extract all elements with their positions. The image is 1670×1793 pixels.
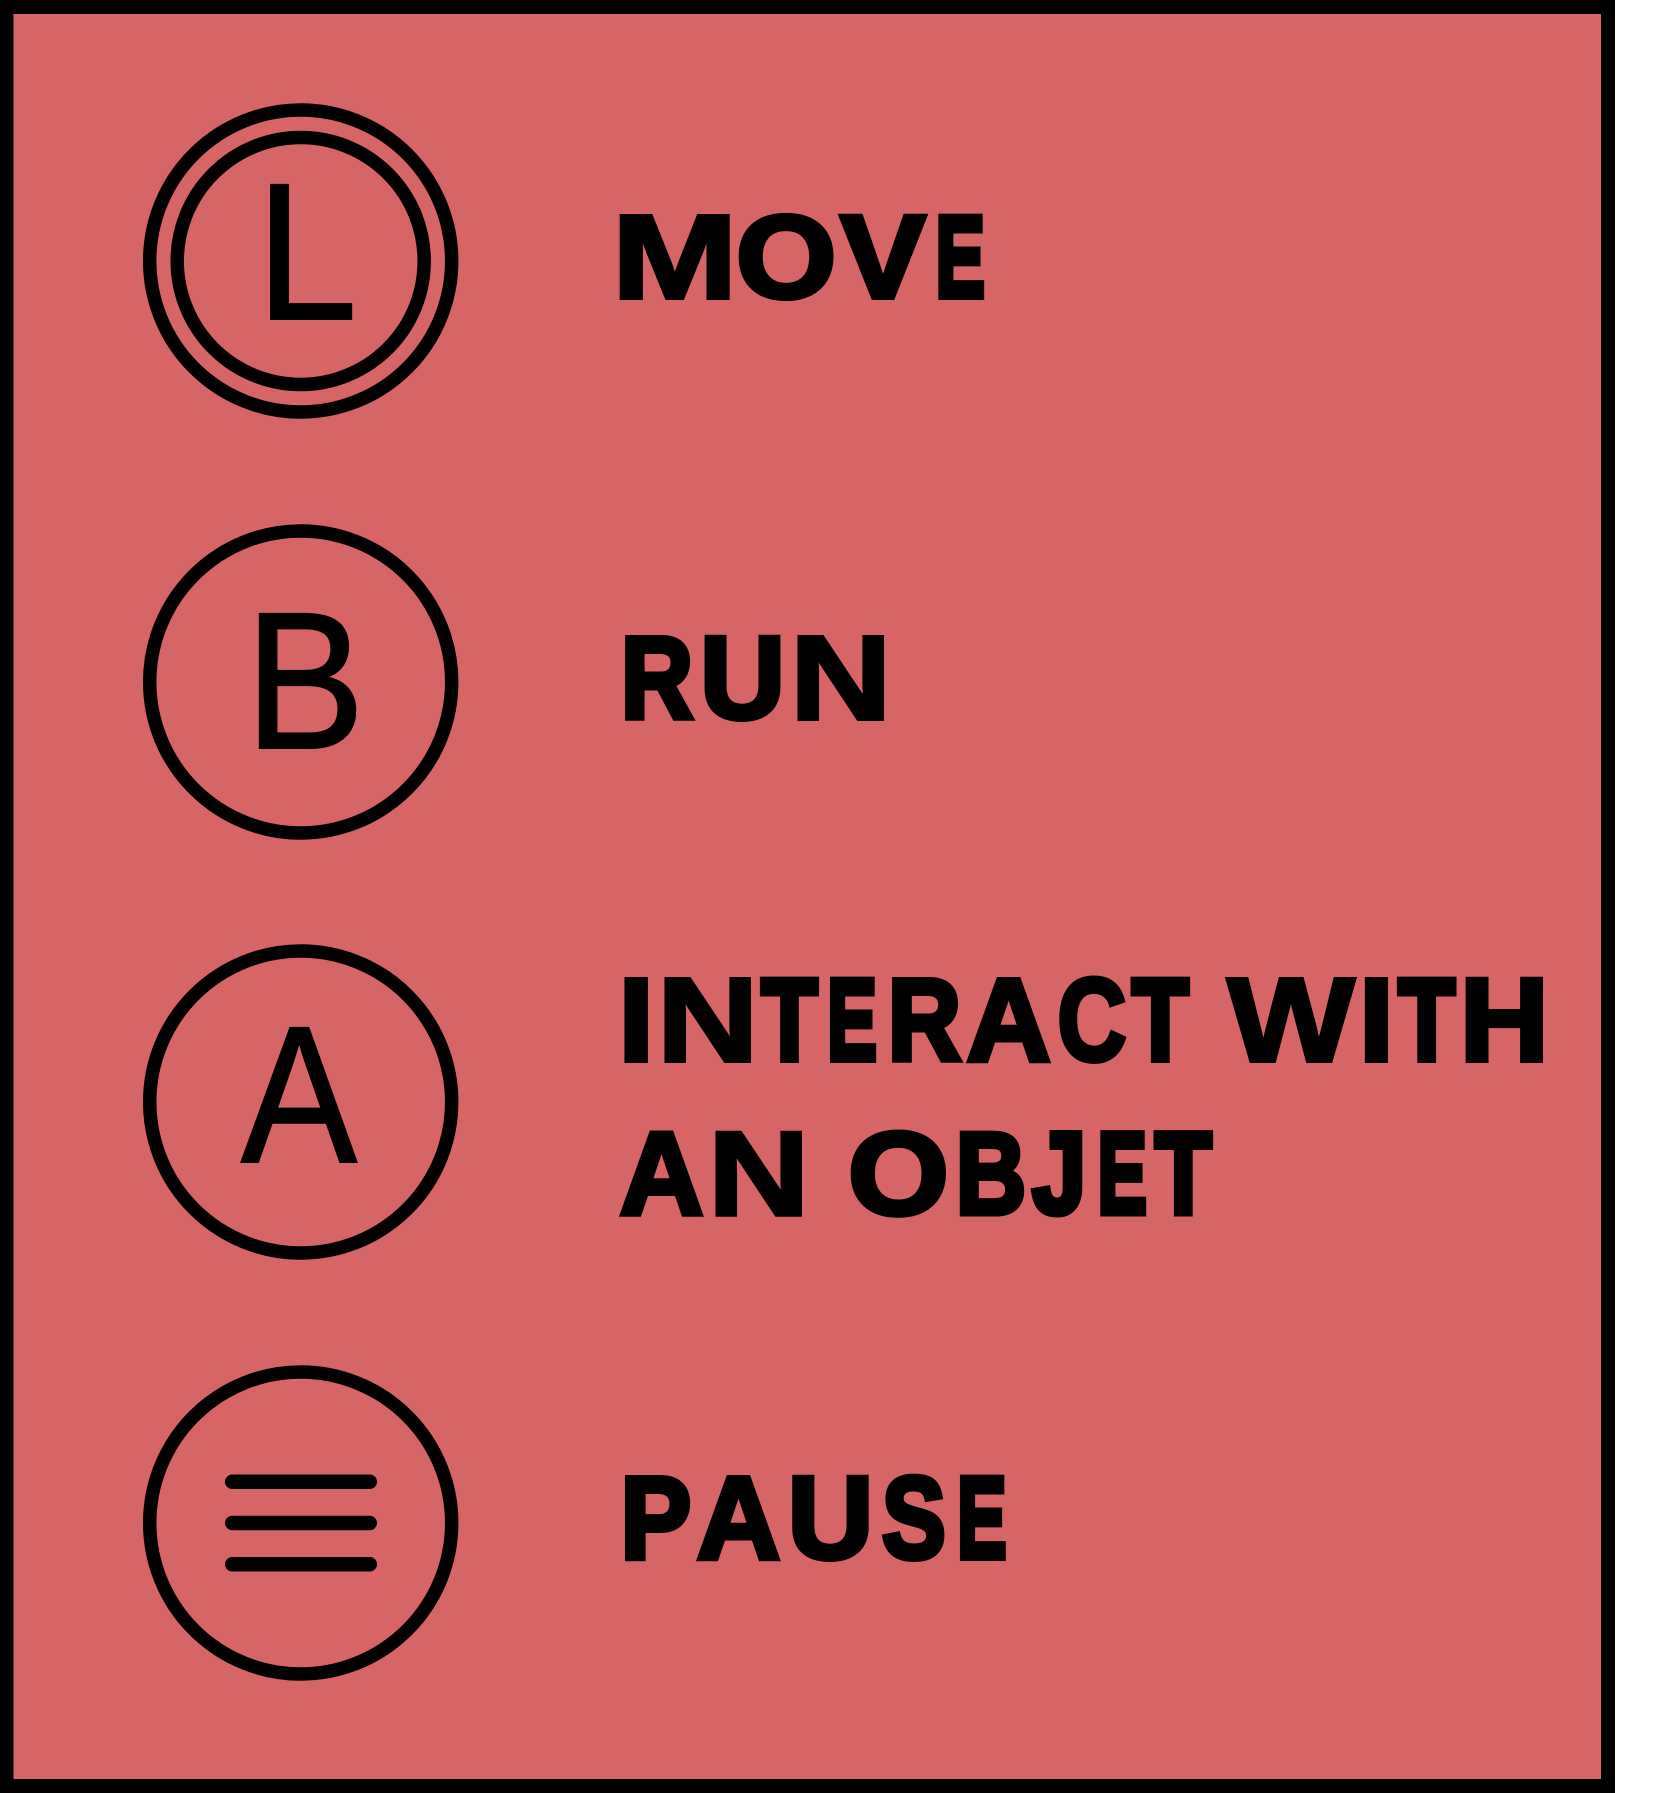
icon: A button: A [241,986,357,1204]
label: move: M [611,190,738,324]
icon: L stick button: L [256,143,357,361]
label: interact with an object: I [1357,952,1395,1088]
label: pause: U [788,1452,873,1584]
label: interact with an object: O [848,1107,949,1239]
label: interact with an object: A [966,954,1051,1086]
label: interact with an object: B [956,1109,1026,1239]
label: move: V [840,190,925,322]
label: interact with an object: N [657,952,759,1088]
icon: menu button [150,1372,452,1674]
label: interact with an object: J [1032,1110,1086,1238]
label: interact with an object: R [888,955,961,1085]
label: run: N [790,610,892,746]
label: interact with an object: C [1057,954,1126,1086]
label: run: R [621,613,693,743]
label: interact with an object: E [1098,1110,1147,1238]
label: pause: A [696,1452,780,1584]
label: interact with an object: N [708,1106,810,1241]
icon: A button [150,951,452,1253]
label: interact with an object: E [827,956,877,1084]
label: pause: P [621,1453,691,1583]
icon: B button: B [245,572,365,790]
label: interact with an object: I [617,952,656,1088]
label: run: U [700,612,785,744]
label: interact with an object: T [762,956,817,1084]
label: interact with an object: T [1399,956,1455,1084]
label: pause: E [957,1454,1006,1582]
label: interact with an object: T [1155,1110,1211,1238]
label: interact with an object [617,952,1549,1241]
icon: L stick button [150,110,452,412]
label: move: O [736,190,836,322]
label: interact with an object: A [620,1107,704,1239]
label: interact with an object: T [1132,956,1188,1084]
label: pause: S [882,1453,946,1583]
label: move: E [936,194,985,322]
label: interact with an object: W [1227,952,1355,1088]
icon: B button [150,531,452,833]
label: interact with an object: H [1460,954,1549,1086]
